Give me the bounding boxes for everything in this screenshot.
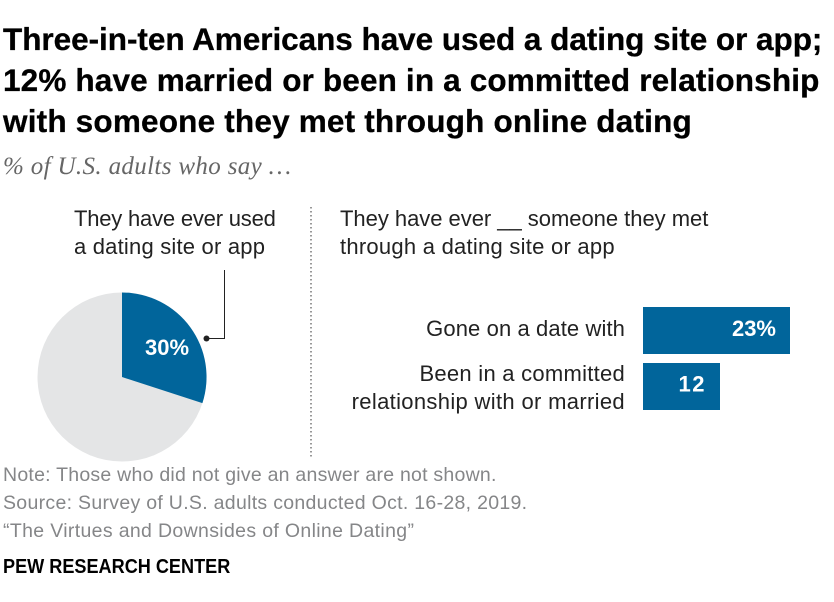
bar: committed relationship: 12 [679, 372, 706, 396]
bar: committed relationship [643, 363, 720, 410]
bar label: committed relationship [352, 361, 625, 414]
pie chart heading: They have ever used [74, 206, 276, 231]
credit: PEW RESEARCH CENTER [3, 556, 230, 578]
divider [310, 207, 312, 458]
bar: gone on a date: 23% [732, 316, 776, 341]
note and source: Note: Those who did not give an answer are not shown. [3, 464, 497, 486]
bar: gone on a date [643, 307, 790, 354]
bar chart heading: through a dating site or app [340, 234, 615, 259]
pie chart [38, 292, 207, 462]
title [2, 20, 822, 139]
note and source [3, 464, 527, 542]
bar label: committed relationship: relationship with or married [352, 389, 625, 414]
bar chart [643, 307, 790, 410]
title: 12% have married or been in a committed relationship [3, 62, 820, 98]
pie chart: 30% [145, 335, 189, 360]
note and source: “The Virtues and Downsides of Online Dating” [3, 520, 414, 542]
bar label: gone on a date: Gone on a date with [426, 316, 625, 341]
bar chart heading: They have ever __ someone they met [340, 206, 708, 231]
bar label: committed relationship: Been in a committed [420, 361, 625, 386]
note and source: Source: Survey of U.S. adults conducted Oct. 16-28, 2019. [3, 492, 527, 514]
title: with someone they met through online dating [3, 102, 692, 138]
title: Three-in-ten Americans have used a dating site or app; [3, 20, 822, 56]
subtitle: % of U.S. adults who say … [3, 153, 291, 180]
pie chart heading: a dating site or app [74, 234, 265, 259]
bar chart heading [340, 206, 708, 259]
pie chart heading [74, 206, 276, 259]
leader line [204, 270, 224, 342]
